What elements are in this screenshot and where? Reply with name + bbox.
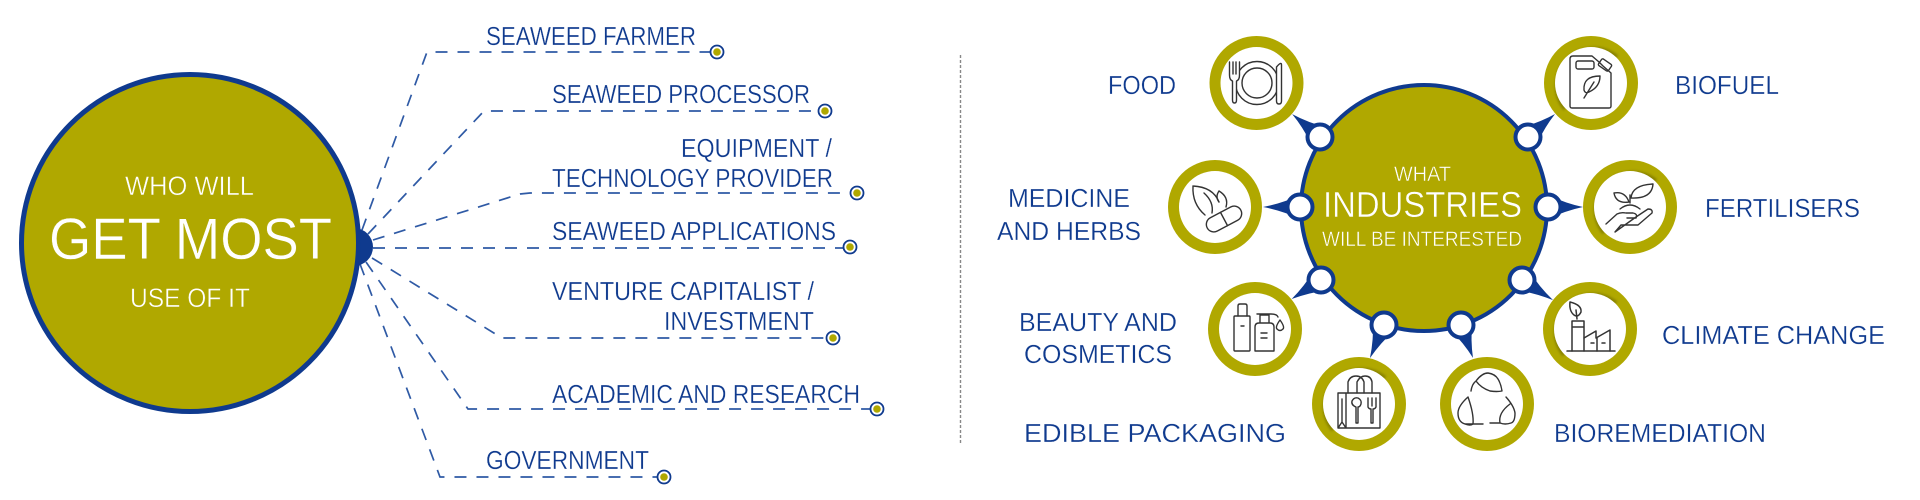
icon: fertilisers — [1583, 160, 1677, 254]
label: fertilisers: FERTILISERS — [1705, 193, 1860, 223]
label: seaweed farmer: SEAWEED FARMER — [486, 21, 696, 51]
icon: biofuel — [1544, 36, 1638, 130]
label: medicine and herbs: AND HERBS — [997, 216, 1141, 246]
panel: who will get most use of it — [22, 21, 884, 484]
main circle text: WHO WILL — [125, 171, 254, 201]
main circle text — [49, 171, 332, 313]
main circle text: GET MOST — [49, 207, 332, 272]
icon: climate change — [1543, 282, 1637, 376]
label: medicine and herbs — [997, 183, 1141, 246]
center text — [1322, 163, 1522, 251]
label: beauty and cosmetics: BEAUTY AND — [1019, 307, 1177, 337]
main circle text: USE OF IT — [130, 283, 250, 313]
connector lines — [360, 52, 872, 477]
main circle — [22, 74, 358, 412]
label: biofuel: BIOFUEL — [1675, 70, 1779, 100]
label: food: FOOD — [1108, 70, 1176, 100]
center text: WHAT — [1394, 163, 1451, 186]
label: equipment technology provider: EQUIPMENT / — [681, 133, 833, 163]
label: climate change: CLIMATE CHANGE — [1662, 320, 1885, 350]
icon: medicine and herbs — [1168, 160, 1262, 254]
label: venture capitalist investment: INVESTMENT — [664, 306, 814, 336]
center text: WILL BE INTERESTED — [1322, 228, 1522, 251]
center text: INDUSTRIES — [1323, 184, 1522, 225]
panel: what industries will be interested — [997, 36, 1885, 451]
connector nodes — [1288, 124, 1560, 338]
icon: edible packaging — [1312, 357, 1406, 451]
label: equipment technology provider — [552, 133, 864, 200]
label: beauty and cosmetics: COSMETICS — [1024, 339, 1172, 369]
center circle — [1301, 85, 1547, 331]
icon: food — [1210, 36, 1304, 130]
hub — [335, 228, 373, 266]
icon: bioremediation — [1440, 357, 1534, 451]
label: seaweed applications: SEAWEED APPLICATIONS — [552, 216, 836, 246]
label: equipment technology provider: TECHNOLOGY PROVIDER — [552, 163, 833, 193]
label: medicine and herbs: MEDICINE — [1008, 183, 1130, 213]
label: academic and research: ACADEMIC AND RESEARCH — [552, 379, 860, 409]
label: venture capitalist investment — [552, 276, 840, 344]
label: edible packaging: EDIBLE PACKAGING — [1024, 418, 1286, 448]
label: bioremediation: BIOREMEDIATION — [1554, 418, 1766, 448]
label: seaweed processor: SEAWEED PROCESSOR — [552, 79, 810, 109]
label: beauty and cosmetics — [1019, 307, 1177, 369]
icon: beauty and cosmetics — [1208, 282, 1302, 376]
label: venture capitalist investment: VENTURE CAPITALIST / — [552, 276, 815, 306]
label: government: GOVERNMENT — [486, 445, 649, 475]
pointers — [1263, 105, 1583, 363]
